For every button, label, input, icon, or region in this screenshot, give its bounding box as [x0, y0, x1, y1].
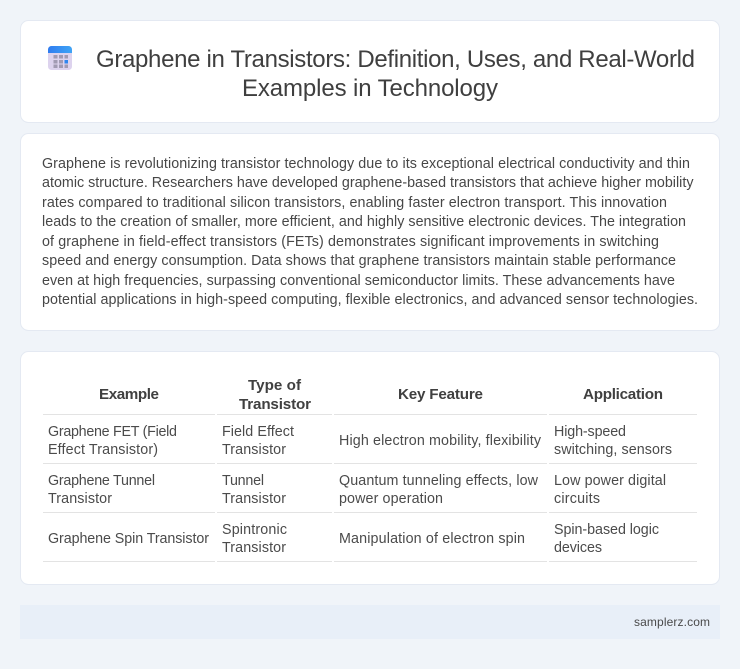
text block: description: even at high frequencies, surpassing conventional semiconductor limits. These advancements have [42, 273, 675, 289]
table row: Graphene Tunnel Transistor: circuits [554, 491, 600, 507]
text block: description: Graphene is revolutionizing transistor technology due to its exceptional electrical conductivity and thin [42, 156, 690, 172]
table row: Graphene Tunnel Transistor [43, 473, 697, 512]
panel: title header [20, 20, 720, 122]
table header row: Application [583, 386, 663, 403]
table row: Graphene FET: Transistor [222, 442, 286, 458]
table header row: Transistor [239, 396, 311, 413]
table row: Graphene Tunnel Transistor: power operation [339, 491, 443, 507]
table row: Graphene Tunnel Transistor: Quantum tunneling effects, low [339, 473, 539, 489]
text block: description: speed and energy consumption. Data shows that graphene transistors maintain stable performance [42, 253, 676, 269]
text block: description: atomic structure. Researchers have developed graphene-based transistors that achieve higher mobility [42, 175, 694, 191]
table row: Graphene Tunnel Transistor: Transistor [222, 491, 286, 507]
text block: description: rates compared to traditional silicon transistors, enabling faster electron transport. This innovation [42, 195, 667, 211]
table row: Graphene Spin Transistor: devices [554, 540, 602, 556]
table row: Graphene Tunnel Transistor: Transistor [48, 491, 112, 507]
table row: Graphene FET: Graphene FET (Field [48, 424, 177, 440]
panel: description [20, 134, 720, 330]
text block: description [42, 156, 698, 308]
table header row [43, 377, 697, 414]
heading: Graphene in Transistors: Definition, Uses, and Real-World [96, 46, 695, 73]
table header row: Type of [248, 377, 302, 394]
text block: description: potential applications in high-speed computing, flexible electronics, and advanced sensor technologies. [42, 292, 698, 308]
table header row: Example [99, 386, 159, 403]
table row: Graphene Spin Transistor [43, 522, 697, 562]
table row: Graphene FET: Effect Transistor) [48, 442, 158, 458]
table header row: Key Feature [398, 386, 483, 403]
table row: Graphene FET: High electron mobility, flexibility [339, 433, 542, 449]
heading [96, 46, 695, 102]
table row: Graphene Spin Transistor: Graphene Spin Transistor [48, 531, 209, 547]
table row: Graphene Spin Transistor: Spintronic [222, 522, 287, 538]
icon: calendar grid [48, 46, 72, 70]
table row: Graphene Tunnel Transistor: Graphene Tunnel [48, 473, 155, 489]
table row: Graphene Spin Transistor: Manipulation of electron spin [339, 531, 525, 547]
heading: Examples in Technology [242, 75, 498, 102]
table row: Graphene Tunnel Transistor: Tunnel [222, 473, 264, 489]
panel: examples table [20, 352, 720, 584]
footer bar [20, 605, 720, 639]
footer bar: samplerz.com [634, 615, 710, 629]
table row: Graphene FET [43, 424, 697, 464]
table row: Graphene Tunnel Transistor: Low power digital [554, 473, 666, 489]
table row: Graphene FET: Field Effect [222, 424, 294, 440]
text block: description: of graphene in field-effect transistors (FETs) demonstrates significant improvements in switching [42, 234, 659, 250]
table row: Graphene FET: switching, sensors [554, 442, 672, 458]
table row: Graphene FET: High-speed [554, 424, 626, 440]
table row: Graphene Spin Transistor: Spin-based logic [554, 522, 659, 538]
text block: description: leads to the creation of smaller, more efficient, and highly sensitive electronic devices. The integration [42, 214, 686, 230]
table row: Graphene Spin Transistor: Transistor [222, 540, 286, 556]
